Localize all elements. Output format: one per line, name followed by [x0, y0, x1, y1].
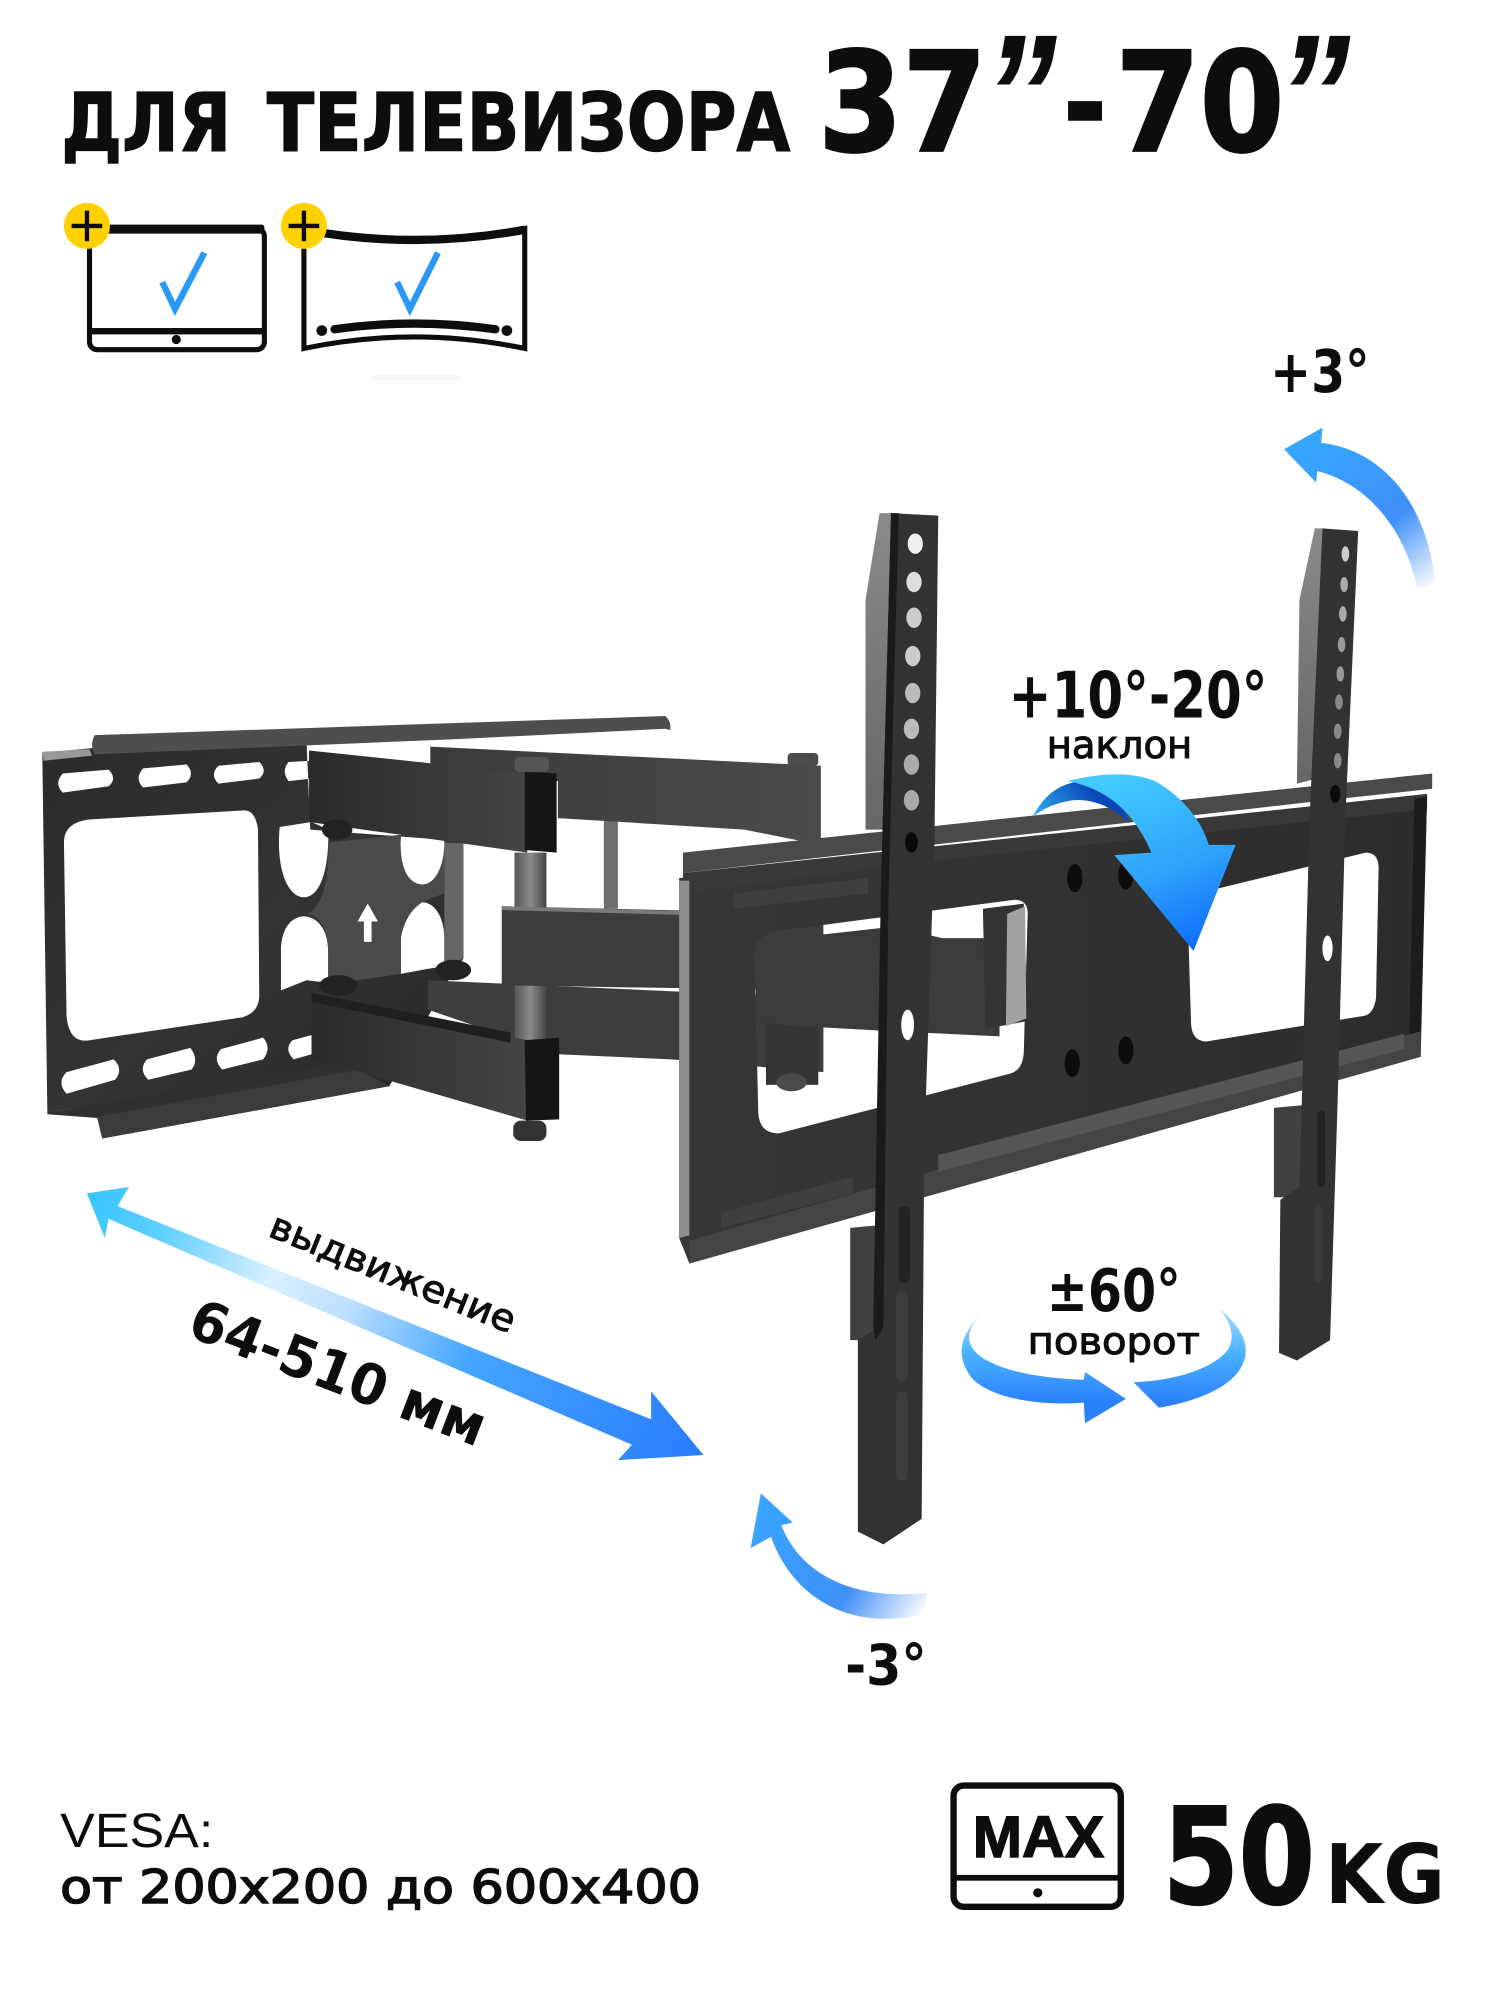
title: 37	[818, 23, 987, 184]
bottom flange	[47, 1070, 389, 1138]
middle arm	[502, 906, 823, 990]
title: ”	[1276, 0, 1351, 191]
top flange	[92, 716, 670, 754]
title	[61, 0, 1351, 191]
label: rotation: поворот	[1028, 1320, 1200, 1363]
label: +3 degrees: +3°	[1270, 338, 1370, 406]
wall plate	[42, 740, 463, 1138]
arrow: rotation	[962, 1308, 1246, 1423]
arrow: tilt	[1033, 774, 1236, 951]
label: rotation	[1028, 1257, 1200, 1363]
VESA text	[60, 1804, 701, 1914]
label: tilt range: +10°-20°	[1008, 659, 1268, 733]
wall arrow mark	[358, 904, 378, 942]
label: rotation: ±60°	[1047, 1257, 1181, 1325]
arm seen through window	[756, 927, 1000, 1036]
rear lower arm	[428, 980, 823, 1072]
center plate mid tone	[306, 835, 444, 983]
label: tilt range	[1008, 659, 1268, 768]
plate lower ribs	[689, 1031, 1421, 1264]
icon: max load monitor: MAX	[973, 1805, 1104, 1870]
label: tilt range: наклон	[1047, 723, 1192, 768]
label: extension range: 64-510 мм	[180, 1287, 495, 1460]
bolts	[515, 757, 549, 772]
arrow: -3 degree swing	[751, 1493, 927, 1619]
pivot caps	[525, 771, 557, 853]
front upper arm	[309, 750, 527, 853]
mounting holes	[1067, 864, 1082, 892]
left vertical strip	[850, 513, 938, 1544]
title: ДЛЯ	[61, 76, 231, 170]
arrow: +3 degree swing	[1284, 428, 1436, 587]
title: ”	[983, 0, 1058, 191]
title: ТЕЛЕВИЗОРА	[267, 76, 790, 170]
right vertical strip	[1274, 528, 1358, 1361]
title: -	[1062, 23, 1108, 184]
pivot rods	[515, 853, 546, 909]
plate top flange	[683, 773, 1432, 873]
front lower arm	[312, 997, 527, 1121]
back vertical bar	[604, 817, 618, 909]
rear upper arm	[430, 747, 821, 845]
max load value: KG	[1325, 1828, 1445, 1923]
VESA text: от 200x200 до 600x400	[60, 1860, 701, 1914]
max load value	[1163, 1781, 1445, 1935]
icon: flat TV	[64, 203, 264, 350]
icon: max load monitor	[954, 1786, 1121, 1907]
icon: curved TV	[281, 203, 525, 380]
wall mount bracket with swing arm	[42, 513, 1432, 1544]
max load value: 50	[1163, 1781, 1315, 1935]
VESA text: VESA:	[60, 1804, 213, 1858]
arrow: extension range	[87, 1187, 703, 1460]
TV plate	[679, 794, 1427, 1264]
title: 70	[1116, 23, 1284, 184]
lighter center column	[444, 842, 463, 966]
label: -3 degrees: -3°	[845, 1634, 927, 1699]
label: extension: выдвижение	[264, 1204, 522, 1342]
